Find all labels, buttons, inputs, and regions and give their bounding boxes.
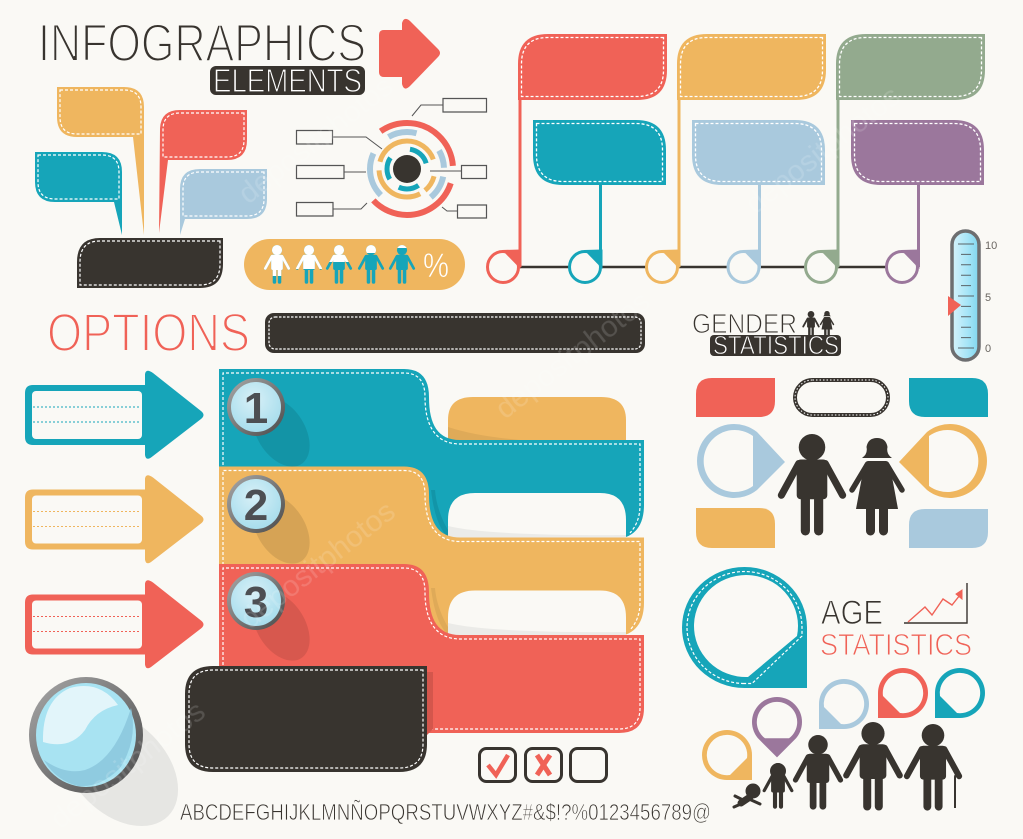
panel: stacked option tabs [219, 369, 644, 733]
panel: gender statistics [696, 378, 988, 548]
watermark [44, 69, 907, 836]
panel: age statistics [682, 567, 985, 808]
bubble: teal [35, 152, 122, 235]
pin: yellow [899, 424, 987, 498]
heading: statistics: STATISTICS [820, 627, 972, 662]
button: number 3 [227, 572, 321, 671]
thermometer gauge: 5 [985, 292, 991, 304]
heading: gender statistics [692, 308, 841, 360]
note: teal [533, 120, 666, 282]
bubble: light blue [180, 169, 267, 235]
heading: gender statistics: STATISTICS [713, 330, 839, 360]
icon: senior with cane [907, 724, 959, 808]
icon: man [781, 434, 843, 531]
arrow label: yellow [25, 475, 204, 563]
bubble: dark [77, 238, 223, 288]
watermark: depositphotos [489, 284, 657, 426]
icon: teen [796, 735, 840, 806]
icon: woman [852, 438, 902, 531]
note: yellow [646, 34, 826, 282]
watermark: depositphotos [232, 69, 400, 211]
button: number 3: 3 [244, 578, 268, 627]
leaf: light blue [909, 509, 988, 548]
dark stitched box [185, 666, 433, 772]
thermometer gauge: 0 [985, 343, 991, 355]
watermark: depositphotos [234, 494, 402, 636]
pin: teal [935, 668, 985, 718]
button: number 1: 1 [244, 384, 268, 433]
big teal pin [682, 567, 807, 688]
checkboxes [480, 748, 606, 782]
icon: red arrow [379, 19, 440, 89]
alphabet specimen: ABCDEFGHIJKLMNÑOPQRSTUVWXYZ#&$!?%0123456789@ [180, 799, 711, 825]
arrow label: teal [25, 371, 204, 459]
heading: options: OPTIONS [47, 303, 250, 363]
icon: baby [734, 784, 760, 807]
checkbox: check [480, 748, 516, 782]
arrow label: red [25, 580, 204, 668]
option 2 tab [219, 466, 644, 638]
pin: light blue [697, 424, 785, 498]
note: purple [851, 120, 984, 282]
pin: red [878, 668, 928, 718]
pin: purple [742, 687, 812, 757]
pin: light blue [819, 679, 869, 729]
tab behind [448, 397, 626, 440]
radial chart [296, 98, 486, 218]
panel: speech bubbles [35, 87, 267, 288]
pill outline [795, 380, 888, 415]
watermark: depositphotos [44, 694, 212, 836]
pin: yellow [702, 730, 752, 780]
checkbox: empty [570, 748, 606, 782]
panel: percent pill with people: % [423, 247, 449, 285]
leaf: red [696, 378, 775, 417]
leaf: teal [909, 378, 988, 417]
trend chart icon [904, 583, 967, 623]
title: INFOGRAPHICS [38, 14, 366, 73]
button: number 1 [227, 378, 321, 477]
bubble: yellow [57, 87, 144, 235]
icon: adult [846, 722, 900, 807]
button: number 2 [227, 475, 321, 574]
icon: child [764, 763, 792, 807]
note: green [806, 34, 985, 282]
panel: music note flags [488, 34, 985, 282]
thermometer gauge [948, 231, 997, 360]
checkbox: cross [526, 748, 562, 782]
big lens button [29, 677, 201, 839]
panel: percent pill with people [244, 239, 465, 290]
subtitle badge: elements: ELEMENTS [213, 62, 362, 99]
bubble: red [159, 110, 247, 233]
button: number 2: 2 [244, 481, 268, 530]
option 1 tab [219, 369, 644, 540]
thermometer gauge: 10 [985, 240, 997, 252]
heading: gender statistics: GENDER [692, 308, 797, 339]
option 3 tab [219, 564, 644, 733]
watermark: depositphotos [739, 79, 907, 221]
note: red [488, 34, 667, 282]
heading: age: AGE [821, 594, 883, 632]
leaf: yellow [696, 508, 775, 548]
note: light blue [692, 120, 825, 282]
dark stitched bar [265, 313, 645, 353]
